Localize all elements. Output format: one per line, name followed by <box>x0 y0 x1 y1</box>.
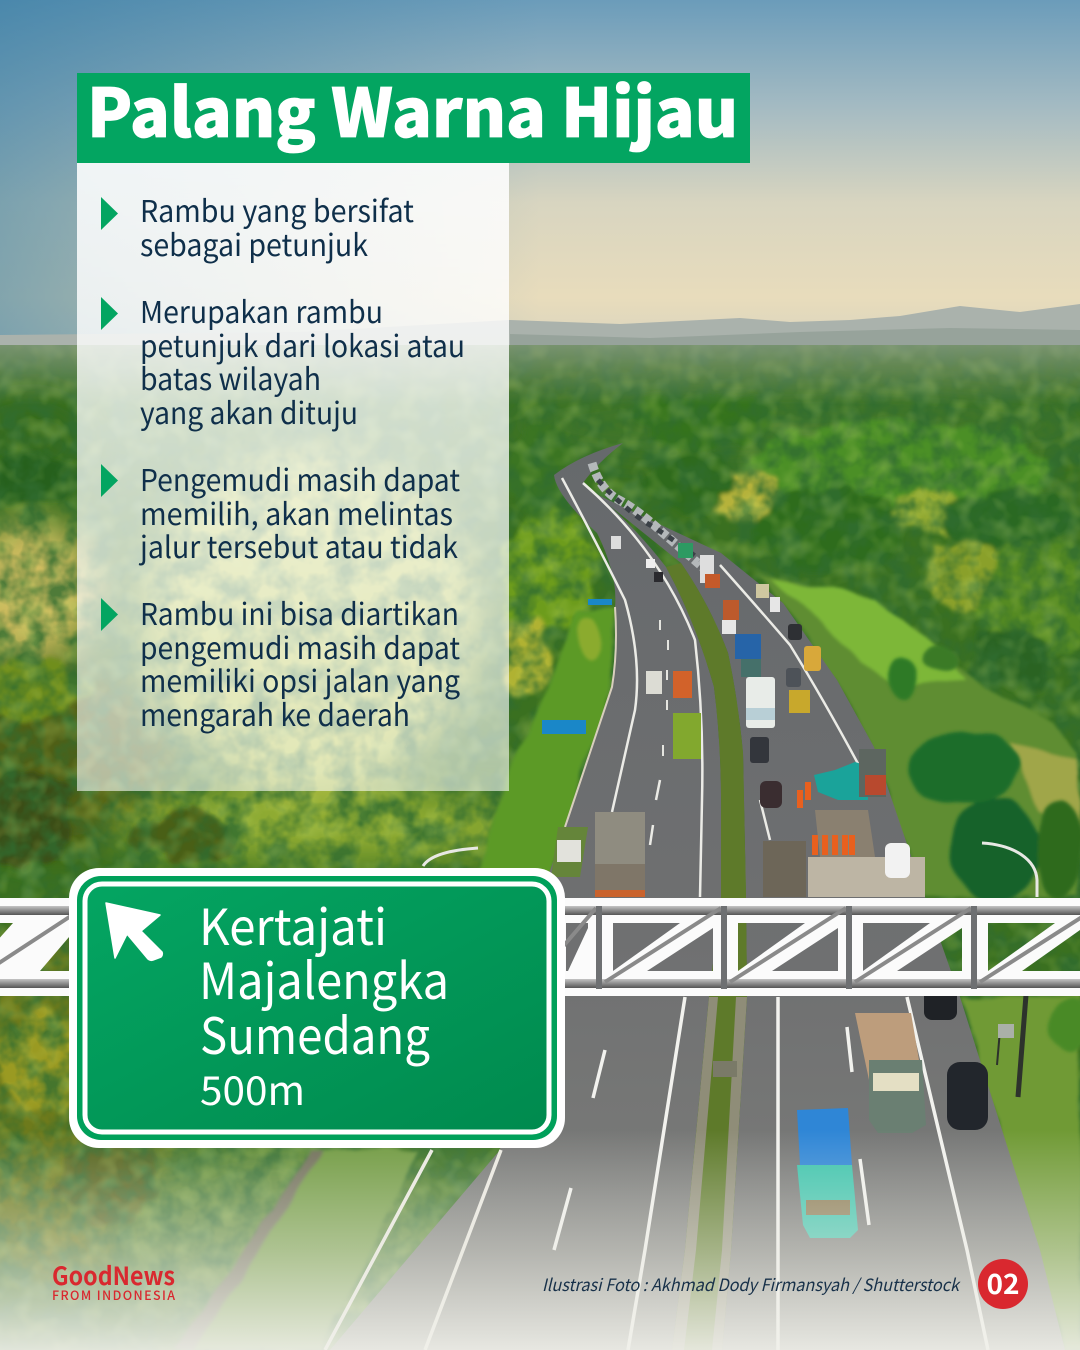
bullet 2 <box>101 288 465 433</box>
tree canopy blobs <box>0 390 1080 1220</box>
bottom white fade <box>0 1130 1080 1350</box>
gantry truss <box>0 898 1080 996</box>
logo: GoodNews from Indonesia: GoodNews <box>52 1257 175 1293</box>
bullet 4: mengarah ke daerah <box>140 691 410 735</box>
bullet 4: memiliki opsi jalan yang <box>140 657 460 701</box>
bullet 3: memilih, akan melintas <box>140 490 453 534</box>
roadside trees <box>578 618 1080 1050</box>
bullet 2: batas wilayah <box>140 355 321 399</box>
bullet 1 <box>101 187 414 265</box>
sign destinations <box>199 888 449 1117</box>
distant haze <box>0 345 1080 405</box>
logo: GoodNews from Indonesia: FROM INDONESIA <box>52 1285 175 1304</box>
sign destinations: Sumedang <box>200 997 430 1069</box>
photo credit: Ilustrasi Foto : Akhmad Dody Firmansyah / Shutterstock <box>542 1271 961 1296</box>
background photo: highway <box>325 443 1065 1350</box>
sign destinations: Kertajati <box>199 888 387 960</box>
bullet 3: Pengemudi masih dapat <box>140 456 460 500</box>
background photo: distant mountains <box>0 304 1080 360</box>
background photo: traffic <box>423 463 1037 1238</box>
bullet 2: yang akan dituju <box>140 389 358 433</box>
bullet 3 <box>101 456 460 567</box>
bullet 1: sebagai petunjuk <box>140 221 368 265</box>
background photo: forest and fields <box>0 345 1080 1350</box>
page number badge <box>978 1259 1028 1309</box>
bullet 2: petunjuk dari lokasi atau <box>140 322 465 366</box>
sign destinations: 500m <box>200 1059 305 1117</box>
panel: bullet list <box>77 163 509 791</box>
grass verges <box>176 572 1080 1350</box>
icon: direction arrow <box>106 903 162 960</box>
title banner: Palang Warna Hijau <box>87 60 738 157</box>
road sign <box>69 868 565 1148</box>
lane markings <box>325 1150 501 1350</box>
bullet 1: Rambu yang bersifat <box>140 187 414 231</box>
bullet 2: Merupakan rambu <box>140 288 383 332</box>
bullet 4: pengemudi masih dapat <box>140 624 460 668</box>
median strip <box>666 563 747 1350</box>
page number badge: 02 <box>986 1263 1020 1303</box>
bullet 4: Rambu ini bisa diartikan <box>140 590 459 634</box>
bullet 4 <box>101 590 460 735</box>
background photo: sky <box>0 0 1080 350</box>
bullet 3: jalur tersebut atau tidak <box>138 523 458 567</box>
sign destinations: Majalengka <box>199 942 449 1014</box>
